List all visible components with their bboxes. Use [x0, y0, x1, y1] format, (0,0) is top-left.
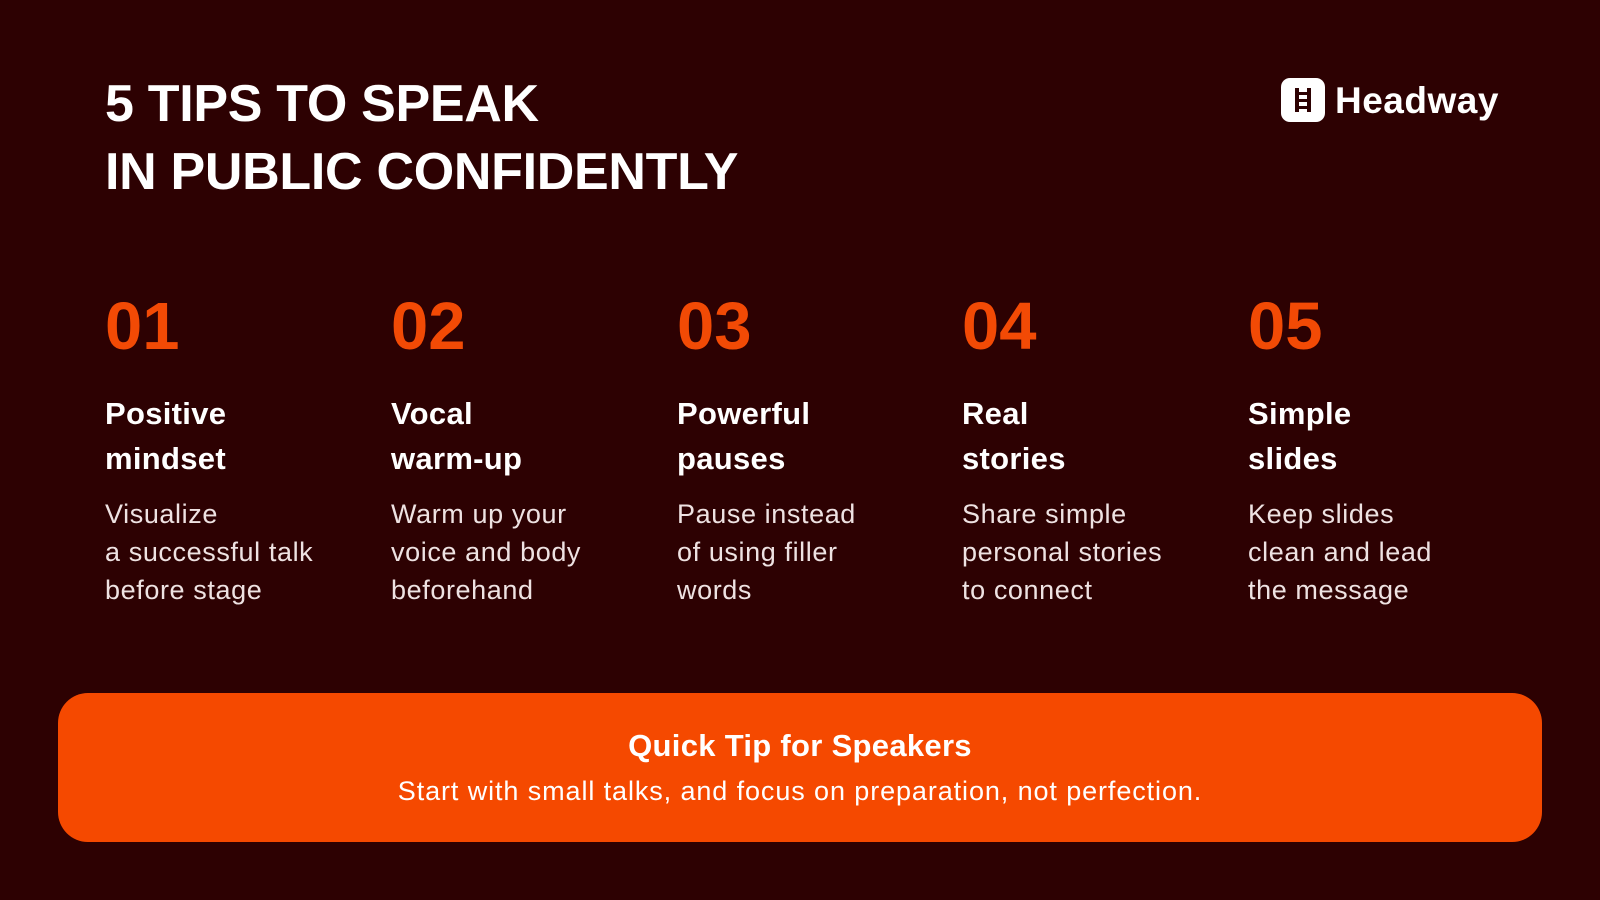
tip 05: Simple [1248, 396, 1351, 431]
tip 02: 02 [391, 289, 466, 364]
tip 01: 01 [105, 289, 180, 364]
tip 04: to connect [962, 575, 1093, 605]
tip 02: voice and body [391, 537, 581, 567]
tip 04 [962, 289, 1162, 605]
tip 01 [105, 289, 313, 605]
tip 04: 04 [962, 289, 1037, 364]
tip 02: beforehand [391, 575, 534, 605]
tip 05: slides [1248, 441, 1338, 476]
tip 03: 03 [677, 289, 752, 364]
tip 03: Powerful [677, 396, 810, 431]
tip 01: Visualize [105, 499, 218, 529]
tip 01: mindset [105, 441, 226, 476]
tip 01: a successful talk [105, 537, 313, 567]
tip 03: of using filler [677, 537, 838, 567]
banner text: Start with small talks, and focus on preparation, not perfection. [398, 776, 1202, 806]
tip 04: Share simple [962, 499, 1127, 529]
tip 05: 05 [1248, 289, 1323, 364]
tip 03: Pause instead [677, 499, 856, 529]
tip 05: Keep slides [1248, 499, 1394, 529]
tip 03 [677, 289, 856, 605]
tip 02: Vocal [391, 396, 473, 431]
tip 03: words [677, 575, 752, 605]
tip 01: Positive [105, 396, 226, 431]
tip 03: pauses [677, 441, 786, 476]
banner heading: Quick Tip for Speakers [628, 728, 972, 763]
icon: logo mark [1281, 78, 1325, 122]
tip 05 [1248, 289, 1432, 605]
tip 05: the message [1248, 575, 1409, 605]
title: 5 TIPS TO SPEAK [105, 75, 539, 133]
tip 02 [390, 289, 581, 605]
logo: Headway [1335, 80, 1499, 121]
callout: quick tip banner [58, 693, 1542, 842]
tip 02: warm-up [391, 441, 522, 476]
tip 04: Real [962, 396, 1029, 431]
title: IN PUBLIC CONFIDENTLY [105, 143, 738, 201]
tip 05: clean and lead [1248, 537, 1432, 567]
tip 01: before stage [105, 575, 262, 605]
title [105, 75, 738, 201]
tip 04: stories [962, 441, 1066, 476]
tip 04: personal stories [962, 537, 1162, 567]
tip 02: Warm up your [391, 499, 567, 529]
